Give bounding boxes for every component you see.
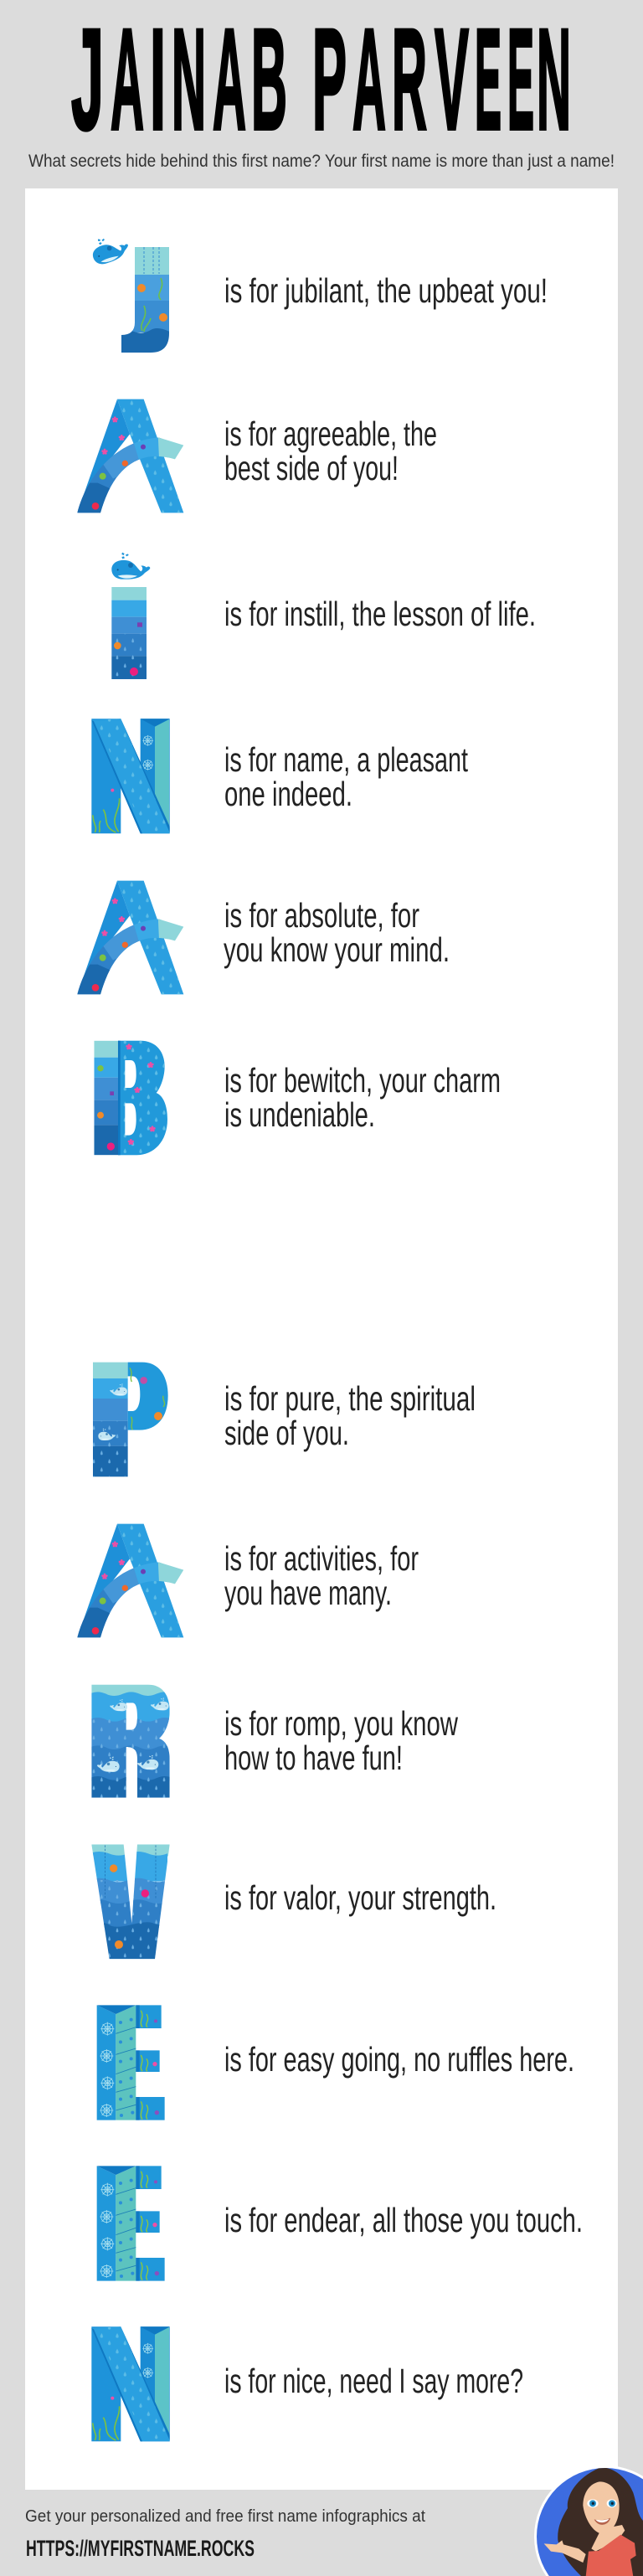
- title: I: [150, 0, 166, 160]
- text: R line: how to have fun!: [224, 1739, 403, 1777]
- icon: letter E second: [97, 2166, 165, 2281]
- avatar: woman in blue circle: [534, 2465, 643, 2576]
- icon: letter A third: [73, 1524, 188, 1644]
- icon: letter J with whale: [92, 238, 169, 353]
- text: A third line: is for activities, for: [224, 1539, 419, 1578]
- text: A third line: you have many.: [224, 1574, 392, 1612]
- title: A: [213, 0, 246, 160]
- text: B line: is undeniable.: [224, 1095, 375, 1134]
- icon: letter N second: [91, 2326, 170, 2441]
- text: A third line: [224, 1539, 419, 1612]
- text: N line: [224, 740, 468, 813]
- icon: letter V: [92, 1844, 169, 1960]
- text: N: [537, 0, 571, 160]
- footer text: url: HTTPS://MYFIRSTNAME.ROCKS: [26, 2536, 255, 2561]
- title: E: [475, 0, 502, 160]
- footer text: call to action: Get your personalized and free first name infographics at: [25, 2507, 425, 2526]
- title: V: [435, 0, 469, 160]
- text: A second line: you know your mind.: [224, 930, 450, 969]
- icon: letter I with whale: [111, 553, 150, 679]
- text: B line: [224, 1061, 501, 1134]
- title: R: [392, 0, 427, 160]
- text: N line: is for name, a pleasant: [224, 740, 468, 779]
- text: B line: is for bewitch, your charm: [224, 1061, 501, 1100]
- text: A line: [224, 415, 437, 487]
- icon: letter R: [90, 1683, 173, 1799]
- title: [71, 0, 571, 160]
- title: J: [71, 0, 104, 160]
- title: A: [352, 0, 386, 160]
- text: R line: [224, 1704, 458, 1777]
- text: N line: one indeed.: [224, 775, 352, 813]
- text: P line: is for pure, the spiritual: [224, 1379, 476, 1418]
- text: A second line: [224, 896, 450, 969]
- text: P line: side of you.: [224, 1414, 349, 1452]
- text: A second line: is for absolute, for: [224, 896, 419, 935]
- icon: letter A second: [73, 881, 188, 1001]
- text: V line: is for valor, your strength.: [224, 1878, 496, 1917]
- icon: letter B: [94, 1038, 171, 1158]
- icon: letter P: [93, 1363, 168, 1476]
- text: A line: is for agreeable, the: [224, 415, 437, 453]
- text: N second line: is for nice, need I say more?: [224, 2362, 523, 2400]
- title: E: [507, 0, 534, 160]
- text: P line: [224, 1379, 476, 1452]
- title: N: [172, 0, 206, 160]
- title: B: [251, 0, 287, 160]
- title: A: [111, 0, 144, 160]
- title: P: [312, 0, 347, 160]
- text: A line: best side of you!: [224, 449, 399, 487]
- icon: letter N: [91, 719, 170, 833]
- icon: letter A: [73, 399, 188, 519]
- text: R line: is for romp, you know: [224, 1704, 458, 1743]
- icon: letter E: [97, 2005, 165, 2120]
